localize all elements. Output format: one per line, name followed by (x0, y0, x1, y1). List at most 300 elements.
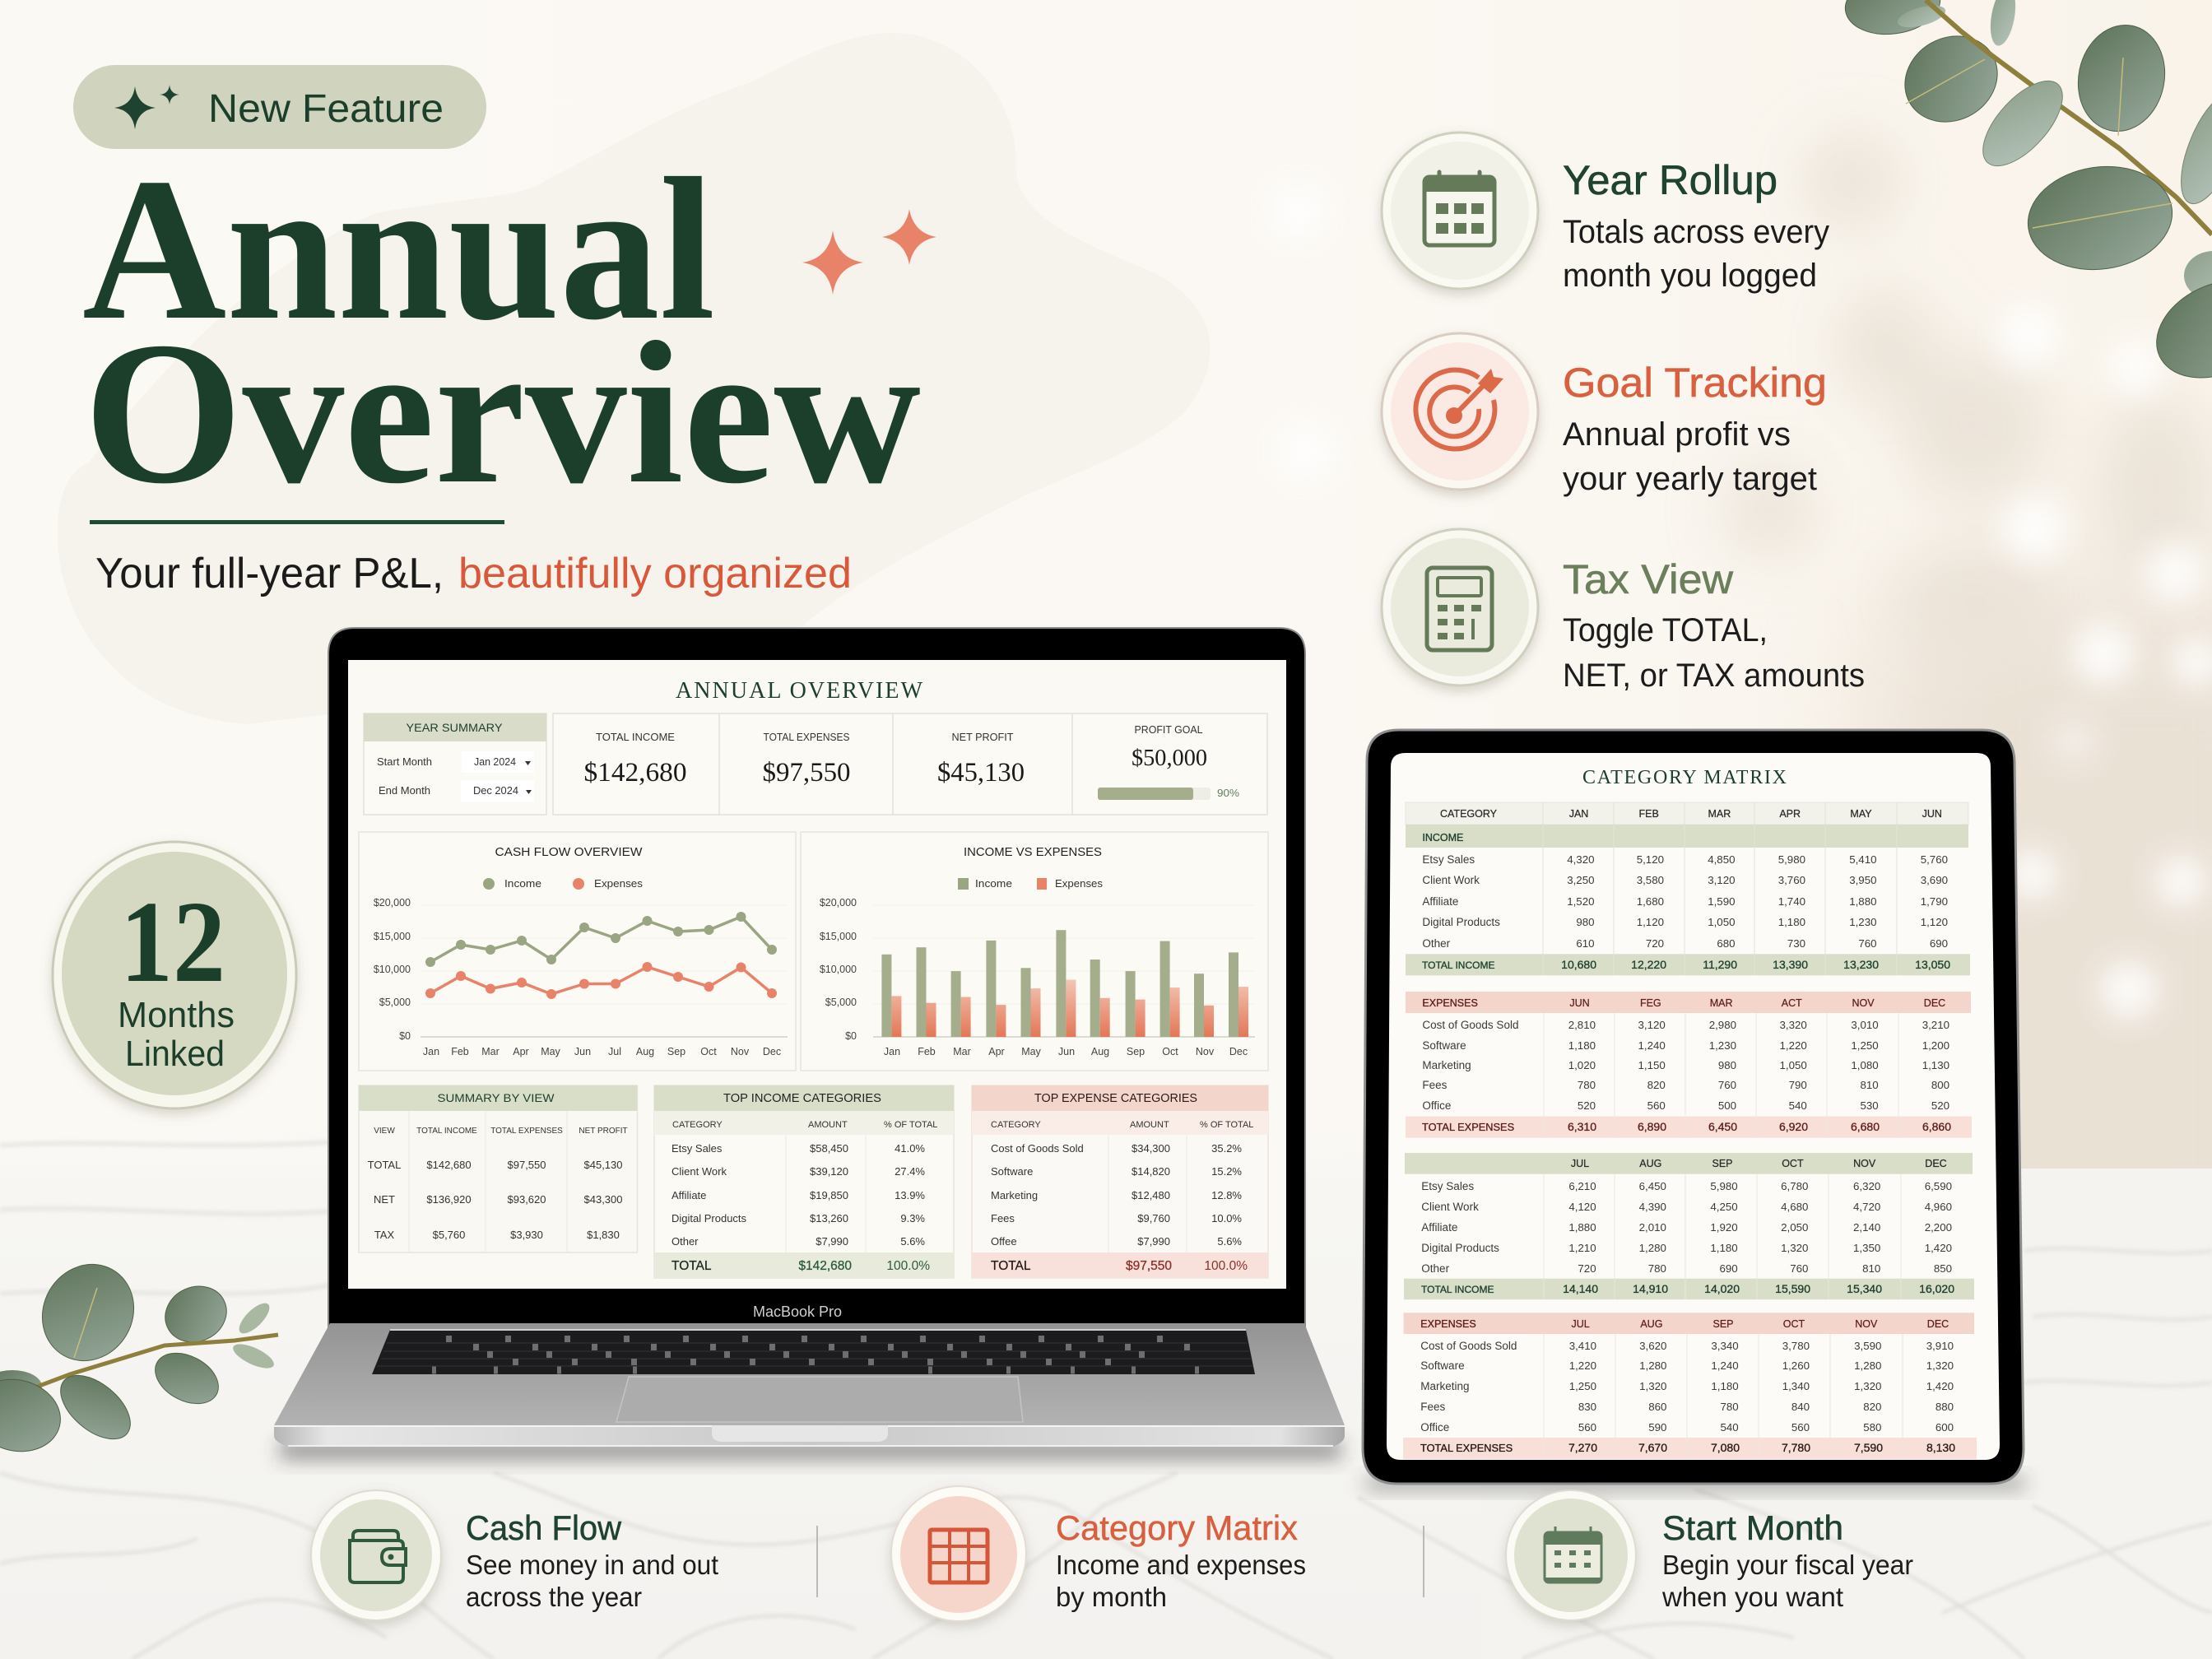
table: summary by view: VIEW (374, 1127, 395, 1136)
laptop lid (328, 628, 1305, 1333)
table: expenses Jul to Dec: 1,340 (1782, 1380, 1810, 1392)
table: expenses Jul to Dec: 1,280 (1854, 1359, 1881, 1372)
KPI: total expenses (762, 731, 851, 788)
icon: sparkles (114, 85, 179, 129)
y axis labels: $15,000 (820, 931, 857, 942)
table: expenses Jul to Dec: 880 (1936, 1401, 1954, 1413)
table: expenses first half: 3,120 (1638, 1019, 1666, 1031)
description: Begin your fiscal year (1662, 1550, 1913, 1580)
table: income Jan to Jun: FEB (1639, 808, 1659, 820)
table: expenses first half: 540 (1789, 1099, 1807, 1112)
table: income Jul to Dec: 720 (1578, 1262, 1596, 1275)
icon circle: target (1382, 333, 1538, 490)
table: expenses first half: FEG (1640, 997, 1661, 1009)
table: top expense categories: CATEGORY (991, 1120, 1041, 1130)
description: when you want (1661, 1582, 1843, 1612)
table: income Jan to Jun: 13,390 (1773, 958, 1808, 971)
expenses line (425, 962, 777, 999)
table: income Jul to Dec: 1,180 (1710, 1242, 1738, 1254)
table: income Jul to Dec: 1,350 (1853, 1242, 1880, 1254)
table: summary by view: NET PROFIT (579, 1127, 628, 1136)
description: Annual profit vs (1563, 416, 1791, 453)
table: expenses Jul to Dec: 1,250 (1569, 1380, 1596, 1392)
table: top expense categories: $7,990 (1137, 1235, 1170, 1248)
table: income Jul to Dec: 780 (1648, 1262, 1666, 1275)
table: top expense categories: $9,760 (1137, 1212, 1170, 1224)
title: Annual (82, 136, 715, 362)
table: expenses Jul to Dec: 1,420 (1926, 1380, 1954, 1392)
table: expenses Jul to Dec: EXPENSES (1420, 1318, 1476, 1330)
table: summary by view: $45,130 (584, 1159, 622, 1171)
table: expenses Jul to Dec: 7,590 (1854, 1441, 1883, 1454)
table: expenses Jul to Dec: 3,910 (1926, 1340, 1954, 1352)
table: expenses Jul to Dec: 7,270 (1568, 1441, 1597, 1454)
table: income Jan to Jun: MAR (1708, 808, 1731, 820)
table: top expense categories: $34,300 (1132, 1142, 1170, 1155)
badge label (118, 995, 235, 1074)
table: top income categories: Affiliate (672, 1189, 706, 1201)
badge: 12 months linked (53, 842, 296, 1108)
device: tablet (1363, 730, 2024, 1489)
icon circle: calendar (1382, 132, 1538, 289)
description: Income and expenses (1056, 1550, 1306, 1580)
x axis labels: Sep (667, 1046, 685, 1057)
table: income Jul to Dec: 1,420 (1925, 1242, 1952, 1254)
table: top expense categories: Cost of Goods Sold (991, 1142, 1084, 1155)
keyboard (372, 1330, 1255, 1374)
table: income Jul to Dec: 1,320 (1781, 1242, 1808, 1254)
table: income Jul to Dec: 6,450 (1639, 1180, 1666, 1192)
table: expenses first half: 980 (1718, 1059, 1736, 1071)
table: income Jan to Jun: 4,850 (1708, 853, 1735, 866)
subtitle: Your full-year P&L, (95, 550, 444, 597)
x axis labels: Dec (1229, 1046, 1248, 1057)
table: top income categories: CATEGORY (672, 1120, 723, 1130)
table: income Jan to Jun: 11,290 (1703, 958, 1737, 971)
decoration: eucalyptus top right (1842, 0, 2212, 397)
description: across the year (466, 1582, 642, 1612)
title: Overview (84, 300, 921, 526)
table: income Jan to Jun: 13,230 (1843, 958, 1879, 971)
table: top income categories: Other (672, 1235, 699, 1248)
legend: Income (504, 877, 541, 890)
description (1563, 214, 1829, 294)
decoration: eucalyptus bottom left (0, 1248, 278, 1461)
table: income Jul to Dec: 2,010 (1639, 1221, 1666, 1234)
tablet shadow (1366, 1477, 2024, 1489)
table: income Jul to Dec: Client Work (1421, 1201, 1479, 1213)
table: summary by view: $97,550 (507, 1159, 546, 1171)
table: top expense categories: Software (991, 1165, 1033, 1178)
table: income Jan to Jun: 730 (1787, 937, 1805, 950)
table: summary by view (359, 1085, 637, 1252)
table: income Jan to Jun: 3,760 (1778, 874, 1805, 886)
table: expenses Jul to Dec: Fees (1420, 1401, 1446, 1413)
table: summary by view: TOTAL INCOME (416, 1127, 477, 1136)
x axis labels: May (1021, 1046, 1042, 1057)
table: expenses Jul to Dec: 1,240 (1711, 1359, 1739, 1372)
table: expenses Jul to Dec: 3,590 (1854, 1340, 1881, 1352)
table: income Jan to Jun: JUN (1922, 808, 1942, 820)
table: income Jul to Dec: TOTAL INCOME (1421, 1284, 1494, 1295)
table: top expense categories: % OF TOTAL (1200, 1120, 1253, 1130)
table: income Jul to Dec: 2,140 (1853, 1221, 1880, 1234)
table: expenses first half: 500 (1718, 1099, 1736, 1112)
table: expenses Jul to Dec: 780 (1721, 1401, 1739, 1413)
total row (654, 1252, 954, 1278)
KPI: profit goal: PROFIT GOAL (1134, 723, 1203, 736)
heading: Tax View (1563, 556, 1734, 602)
description: by month (1056, 1582, 1167, 1612)
table: top expense categories: 10.0% (1211, 1212, 1242, 1224)
table: expenses Jul to Dec (1403, 1313, 1977, 1459)
table: expenses first half: Cost of Goods Sold (1422, 1019, 1518, 1031)
table: top income categories: $7,990 (816, 1235, 848, 1248)
table: income Jan to Jun: 5,980 (1778, 853, 1805, 866)
table: top income categories: 13.9% (895, 1189, 925, 1201)
table: top income categories: Digital Products (672, 1212, 747, 1224)
table: income Jul to Dec: 1,210 (1568, 1242, 1596, 1254)
table: top income categories: % OF TOTAL (884, 1120, 937, 1130)
table: expenses Jul to Dec: 590 (1648, 1421, 1666, 1434)
table: expenses first half: DEC (1924, 997, 1945, 1009)
table: income Jul to Dec: 15,590 (1775, 1282, 1810, 1295)
table: expenses Jul to Dec: 1,320 (1639, 1380, 1666, 1392)
table: expenses Jul to Dec: 860 (1648, 1401, 1666, 1413)
table: income Jul to Dec: 1,920 (1710, 1221, 1738, 1234)
table: top income categories (654, 1085, 954, 1278)
table: income Jul to Dec: 4,960 (1925, 1201, 1952, 1213)
y axis labels: $0 (399, 1030, 411, 1042)
KPI: net profit: $45,130 (937, 758, 1025, 788)
table: income Jul to Dec: NOV (1853, 1158, 1876, 1169)
table: expenses Jul to Dec: 560 (1578, 1421, 1596, 1434)
table: income Jan to Jun: MAY (1850, 808, 1872, 820)
table: top expense categories: 12.8% (1211, 1189, 1242, 1201)
table: summary by view: TAX (374, 1229, 394, 1241)
table: expenses Jul to Dec: 540 (1721, 1421, 1739, 1434)
total row: TOTAL (991, 1259, 1031, 1273)
background: blurred bokeh and shadows (1289, 132, 2212, 1169)
badge label: Linked (125, 1034, 225, 1074)
table: income Jul to Dec: Affiliate (1421, 1221, 1457, 1234)
table: expenses first half: 1,050 (1780, 1059, 1807, 1071)
table: income Jan to Jun: 1,740 (1778, 895, 1805, 908)
x axis labels: Aug (1091, 1046, 1109, 1057)
y axis labels: $20,000 (820, 897, 857, 908)
table: expenses first half: 6,310 (1568, 1120, 1596, 1133)
table: expenses Jul to Dec: JUL (1571, 1318, 1590, 1330)
table: expenses first half: 520 (1578, 1099, 1596, 1112)
y axis labels: $15,000 (374, 931, 411, 942)
table: income Jul to Dec: 850 (1934, 1262, 1952, 1275)
description (1563, 612, 1865, 694)
table: income Jan to Jun: JAN (1569, 808, 1588, 820)
table: income Jan to Jun: 1,790 (1921, 895, 1948, 908)
table: expenses Jul to Dec: 7,080 (1711, 1441, 1740, 1454)
table: income Jul to Dec (1404, 1153, 1974, 1299)
table: expenses first half: 760 (1718, 1079, 1736, 1091)
table: income Jul to Dec: 1,880 (1568, 1221, 1596, 1234)
background: soft blob (58, 33, 1211, 724)
feature: year rollup (1382, 132, 1829, 294)
KPI: profit goal: 90% (1217, 787, 1239, 799)
y axis labels: $0 (845, 1030, 857, 1042)
table: expenses first half: MAR (1710, 997, 1732, 1009)
chart: cash flow overview line chart: CASH FLOW OVERVIEW (495, 846, 643, 859)
table: income Jul to Dec: 690 (1720, 1262, 1738, 1275)
table: expenses first half: NOV (1852, 997, 1875, 1009)
table: expenses first half: JUN (1569, 997, 1590, 1009)
table: income Jul to Dec: 14,020 (1704, 1282, 1740, 1295)
table: expenses first half: 2,980 (1709, 1019, 1736, 1031)
x axis labels: Apr (988, 1046, 1005, 1057)
table: expenses Jul to Dec: 1,320 (1854, 1380, 1881, 1392)
table: income Jan to Jun: 13,050 (1915, 958, 1950, 971)
table: expenses Jul to Dec: SEP (1712, 1318, 1734, 1330)
table: top expense categories: AMOUNT (1130, 1120, 1169, 1130)
table: expenses first half: 1,150 (1638, 1059, 1666, 1071)
table: income Jul to Dec: 4,720 (1853, 1201, 1880, 1213)
x axis labels: Apr (513, 1046, 529, 1057)
table: income Jan to Jun: INCOME (1422, 832, 1463, 843)
table: summary by view: $93,620 (507, 1193, 546, 1206)
income bars (881, 930, 1238, 1037)
y axis labels: $10,000 (374, 964, 411, 975)
table: top expense categories: TOP EXPENSE CATEGORIES (1034, 1091, 1197, 1105)
table: income Jan to Jun: 5,760 (1921, 853, 1948, 866)
table: expenses Jul to Dec: DEC (1927, 1318, 1949, 1330)
x axis labels: Jul (608, 1046, 621, 1057)
y axis labels: $5,000 (379, 997, 411, 1008)
table: income Jan to Jun: 760 (1858, 937, 1876, 950)
table: income Jan to Jun: 10,680 (1561, 958, 1596, 971)
table: income Jan to Jun: Etsy Sales (1422, 853, 1475, 866)
y axis labels: $5,000 (825, 997, 857, 1008)
table: income Jul to Dec: 4,390 (1639, 1201, 1666, 1213)
table: income Jul to Dec: 6,210 (1568, 1180, 1596, 1192)
table: top expense categories: 5.6% (1217, 1235, 1242, 1248)
table: income Jul to Dec: 760 (1790, 1262, 1808, 1275)
table: income Jul to Dec: 5,980 (1710, 1180, 1738, 1192)
table: income Jan to Jun: 690 (1930, 937, 1948, 950)
table: expenses first half: 1,200 (1922, 1039, 1949, 1052)
table: income Jan to Jun: 3,690 (1921, 874, 1948, 886)
feature: cash flow (311, 1490, 718, 1620)
table: income Jul to Dec: 4,250 (1710, 1201, 1738, 1213)
total row (972, 1252, 1268, 1278)
table: expenses first half: 6,680 (1851, 1120, 1880, 1133)
panel: year summary: Start Month (377, 756, 432, 768)
table: summary by view: TOTAL (368, 1159, 401, 1171)
table: income Jan to Jun: 4,320 (1567, 853, 1595, 866)
table: income Jul to Dec: OCT (1782, 1158, 1804, 1169)
table: income Jul to Dec: 810 (1862, 1262, 1880, 1275)
table: expenses first half: 1,240 (1638, 1039, 1666, 1052)
pill label: New Feature (208, 87, 444, 131)
table: expenses first half: 1,180 (1568, 1039, 1596, 1052)
x axis labels: Nov (1196, 1046, 1215, 1057)
y axis labels (820, 897, 857, 1042)
legend (483, 877, 644, 890)
total row: TOTAL (672, 1259, 712, 1273)
description: See money in and out (466, 1550, 718, 1580)
feature: start month (1506, 1490, 1913, 1620)
table: income Jan to Jun: 720 (1646, 937, 1664, 950)
KPI: total expenses: $97,550 (762, 758, 851, 788)
table: expenses first half: Marketing (1422, 1059, 1471, 1071)
table: expenses Jul to Dec: 3,410 (1569, 1340, 1596, 1352)
table: income Jan to Jun: 1,050 (1708, 916, 1735, 928)
table: income Jul to Dec: SEP (1712, 1158, 1733, 1169)
table: income Jan to Jun: 5,120 (1637, 853, 1664, 866)
description (1563, 416, 1817, 497)
table: expenses Jul to Dec: NOV (1855, 1318, 1878, 1330)
table: income Jul to Dec: Other (1421, 1262, 1450, 1275)
total row: 100.0% (886, 1259, 930, 1273)
legend: Expenses (594, 877, 644, 890)
total row: $97,550 (1126, 1259, 1172, 1273)
tablet heading: CATEGORY MATRIX (1582, 767, 1787, 788)
x axis labels: Jan (423, 1046, 439, 1057)
table: income Jan to Jun (1406, 802, 1970, 975)
screen: annual overview dashboard (359, 678, 1268, 1278)
x axis labels: Oct (1162, 1046, 1178, 1057)
table: top income categories: AMOUNT (808, 1120, 848, 1130)
x axis labels: Jan (884, 1046, 900, 1057)
table: income Jul to Dec: Digital Products (1421, 1242, 1499, 1254)
x axis labels: Mar (953, 1046, 971, 1057)
x axis labels: Oct (700, 1046, 717, 1057)
description: your yearly target (1563, 461, 1817, 497)
KPI: total expenses: TOTAL EXPENSES (764, 731, 850, 743)
panel: year summary: End Month (379, 785, 430, 797)
table: summary by view: $43,300 (584, 1193, 622, 1206)
table: expenses first half: 3,210 (1922, 1019, 1949, 1031)
table: income Jan to Jun: TOTAL INCOME (1422, 960, 1494, 971)
table: expenses Jul to Dec: 600 (1936, 1421, 1954, 1434)
y axis labels: $10,000 (820, 964, 857, 975)
table: summary by view: NET (374, 1193, 395, 1206)
badge label: Months (118, 995, 235, 1035)
table: income Jul to Dec: 14,910 (1633, 1282, 1668, 1295)
table: expenses Jul to Dec: Cost of Goods Sold (1420, 1340, 1517, 1352)
device: laptop (274, 628, 1345, 1458)
KPI: net profit: NET PROFIT (951, 731, 1014, 743)
table: income Jul to Dec: 6,320 (1853, 1180, 1880, 1192)
table: top income categories: 5.6% (900, 1235, 925, 1248)
table: income Jan to Jun: 3,580 (1637, 874, 1664, 886)
heading: Start Month (1662, 1508, 1843, 1547)
chart: income vs expenses bar chart (801, 832, 1268, 1071)
x axis labels: Sep (1127, 1046, 1145, 1057)
table: income Jul to Dec: 1,280 (1639, 1242, 1666, 1254)
table: income Jul to Dec: DEC (1925, 1158, 1947, 1169)
table: expenses Jul to Dec: 3,780 (1782, 1340, 1810, 1352)
table: expenses first half: 800 (1931, 1079, 1949, 1091)
description (1661, 1550, 1913, 1612)
y axis labels (374, 897, 411, 1042)
description: Toggle TOTAL, (1563, 612, 1768, 648)
income line (425, 912, 777, 967)
chart: cash flow overview line chart (359, 832, 796, 1071)
heading: Year Rollup (1563, 157, 1778, 203)
table: expenses first half: 3,010 (1851, 1019, 1879, 1031)
feature: tax view (1382, 529, 1865, 694)
big number: 12 (120, 876, 225, 1006)
table: top income categories: Client Work (672, 1165, 727, 1178)
table: income Jul to Dec: Etsy Sales (1421, 1180, 1474, 1192)
table: expenses Jul to Dec: 3,620 (1639, 1340, 1666, 1352)
table: top income categories: $39,120 (810, 1165, 848, 1178)
table: income Jan to Jun: 610 (1576, 937, 1595, 950)
table: expenses first half: 820 (1647, 1079, 1666, 1091)
subtitle (95, 550, 852, 597)
KPI: total income: $142,680 (584, 758, 686, 788)
table: income Jul to Dec: 16,020 (1919, 1282, 1954, 1295)
table: income Jul to Dec: AUG (1639, 1158, 1661, 1169)
legend (958, 877, 1104, 890)
x axis labels: Feb (918, 1046, 936, 1057)
table: income Jul to Dec: 15,340 (1847, 1282, 1882, 1295)
table: income Jan to Jun: Other (1422, 937, 1451, 950)
table: expenses Jul to Dec: 580 (1863, 1421, 1881, 1434)
icon circle: calendar (1506, 1490, 1636, 1620)
description: Totals across every (1563, 214, 1829, 250)
x axis labels: Feb (451, 1046, 469, 1057)
table: income Jan to Jun: 3,250 (1567, 874, 1595, 886)
title (82, 136, 921, 526)
table: income Jan to Jun: 980 (1576, 916, 1595, 928)
chart: income vs expenses bar chart: INCOME VS EXPENSES (964, 846, 1102, 859)
table: summary by view: $1,830 (587, 1229, 620, 1241)
table: income Jan to Jun: 3,950 (1849, 874, 1876, 886)
table: expenses first half: 530 (1861, 1099, 1879, 1112)
legend: Income (975, 877, 1012, 890)
table: top income categories: TOP INCOME CATEGORIES (723, 1091, 881, 1105)
table: expenses first half: 1,020 (1568, 1059, 1596, 1071)
table: expenses first half: 3,320 (1780, 1019, 1807, 1031)
panel: KPI strip (553, 713, 1267, 815)
panel: year summary: YEAR SUMMARY (407, 721, 503, 734)
dashboard title: ANNUAL OVERVIEW (676, 678, 923, 704)
table: income Jan to Jun: 1,590 (1708, 895, 1735, 908)
total row: 100.0% (1204, 1259, 1248, 1273)
icon circle: grid (891, 1486, 1026, 1621)
icon circle: calculator (1382, 529, 1538, 685)
table: expenses Jul to Dec: 3,340 (1711, 1340, 1739, 1352)
x axis labels: Dec (763, 1046, 781, 1057)
table: expenses first half: 520 (1931, 1099, 1949, 1112)
table: expenses first half: 6,920 (1779, 1120, 1808, 1133)
table: top income categories: 9.3% (900, 1212, 925, 1224)
panel: year summary: Dec 2024 (473, 785, 518, 797)
total row: $142,680 (798, 1259, 852, 1273)
table: expenses first half: 560 (1647, 1099, 1666, 1112)
table: expenses first half: 790 (1789, 1079, 1807, 1091)
table: top expense categories: Marketing (991, 1189, 1038, 1201)
table: income Jul to Dec: 2,200 (1925, 1221, 1952, 1234)
feature: category matrix (891, 1486, 1306, 1621)
table: income Jan to Jun: 5,410 (1849, 853, 1876, 866)
table: summary by view: $142,680 (426, 1159, 472, 1171)
table: income Jul to Dec: JUL (1571, 1158, 1589, 1169)
description (466, 1550, 718, 1612)
tablet screen (1387, 753, 2000, 1460)
table: income Jul to Dec: 14,140 (1563, 1282, 1598, 1295)
KPI: profit goal (1098, 723, 1239, 800)
table: income Jul to Dec: 4,680 (1781, 1201, 1808, 1213)
